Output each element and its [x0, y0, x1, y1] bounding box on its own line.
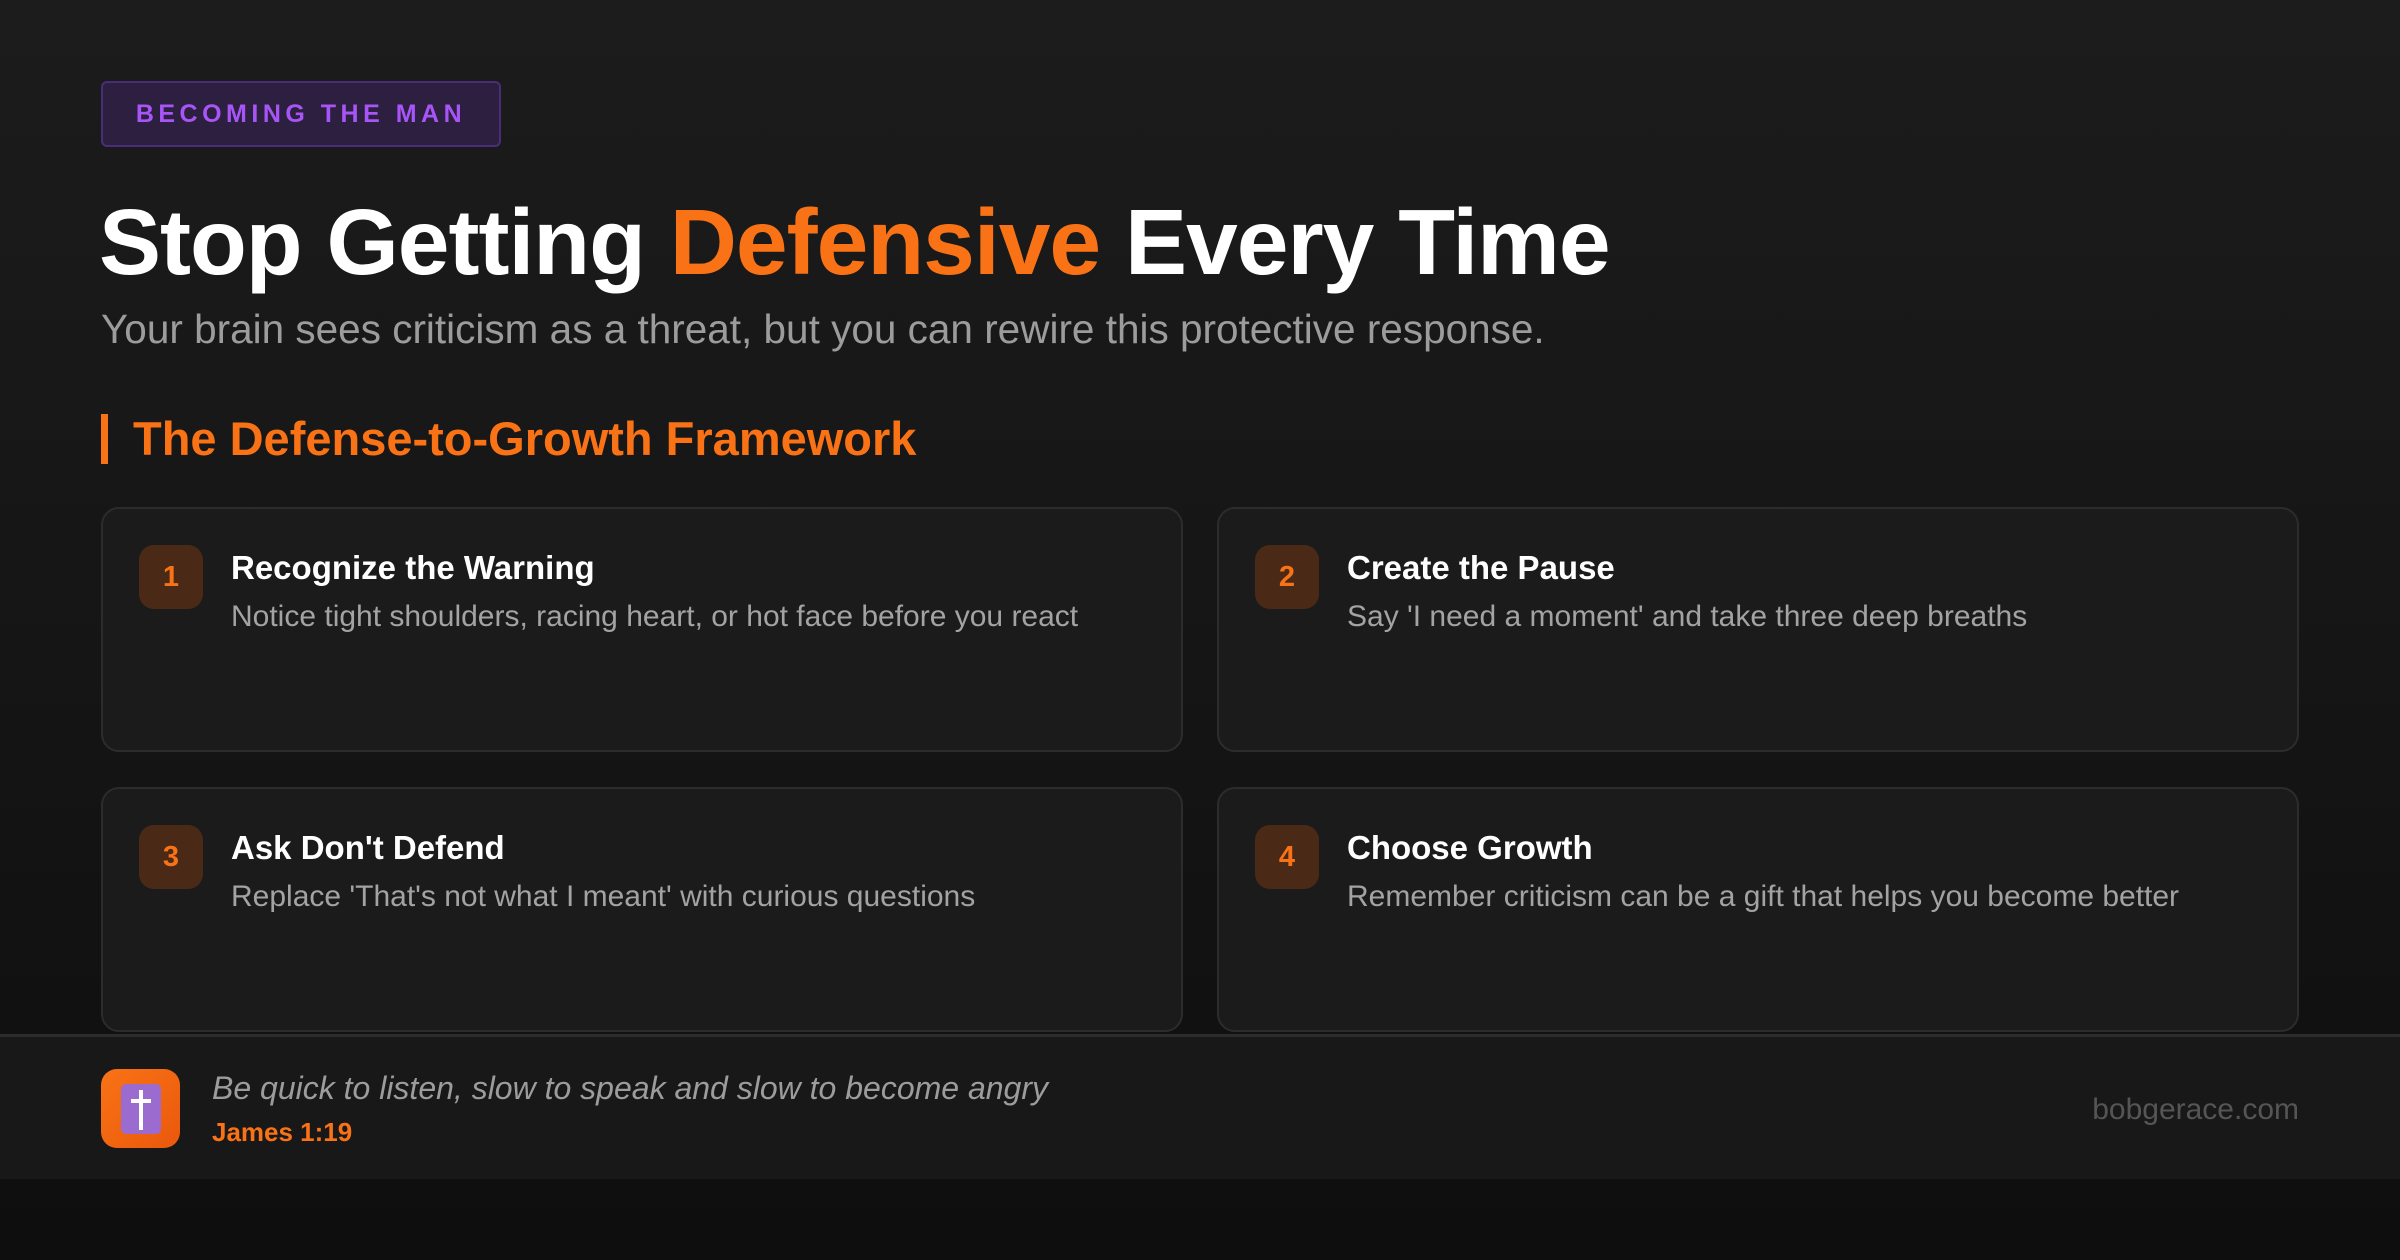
- card 3: [101, 787, 1183, 1032]
- number 3: 3: [163, 840, 179, 872]
- badge: BECOMING THE MAN: [136, 100, 466, 128]
- icon: cross: [101, 1069, 180, 1148]
- number 4: [1255, 825, 1319, 889]
- card 4: [1217, 787, 2299, 1032]
- reference: James 1:19: [212, 1117, 352, 1147]
- number 3: [139, 825, 203, 889]
- number 4: 4: [1279, 840, 1295, 872]
- card 3 text: Replace 'That's not what I meant' with curious questions: [231, 880, 975, 913]
- card 2 text: Say 'I need a moment' and take three deep breaths: [1347, 600, 2027, 633]
- card 2 title: Create the Pause: [1347, 549, 1615, 586]
- badge: [101, 81, 501, 147]
- card 1 title: Recognize the Warning: [231, 549, 595, 586]
- number 2: 2: [1279, 560, 1295, 592]
- card 4 text: Remember criticism can be a gift that helps you become better: [1347, 880, 2179, 913]
- website: bobgerace.com: [2092, 1093, 2299, 1126]
- number 1: 1: [163, 560, 179, 592]
- subtitle: Your brain sees criticism as a threat, but you can rewire this protective response.: [101, 306, 1545, 352]
- card 2: [1217, 507, 2299, 752]
- card 3 title: Ask Don't Defend: [231, 829, 505, 866]
- number 1: [139, 545, 203, 609]
- footer: [0, 1034, 2400, 1179]
- card 4 title: Choose Growth: [1347, 829, 1593, 866]
- quote: Be quick to listen, slow to speak and slow to become angry: [212, 1070, 1048, 1106]
- card 1: [101, 507, 1183, 752]
- card 1 text: Notice tight shoulders, racing heart, or hot face before you react: [231, 600, 1078, 633]
- number 2: [1255, 545, 1319, 609]
- section heading: The Defense-to-Growth Framework: [133, 412, 916, 465]
- title: Stop Getting Defensive Every Time: [99, 190, 1610, 294]
